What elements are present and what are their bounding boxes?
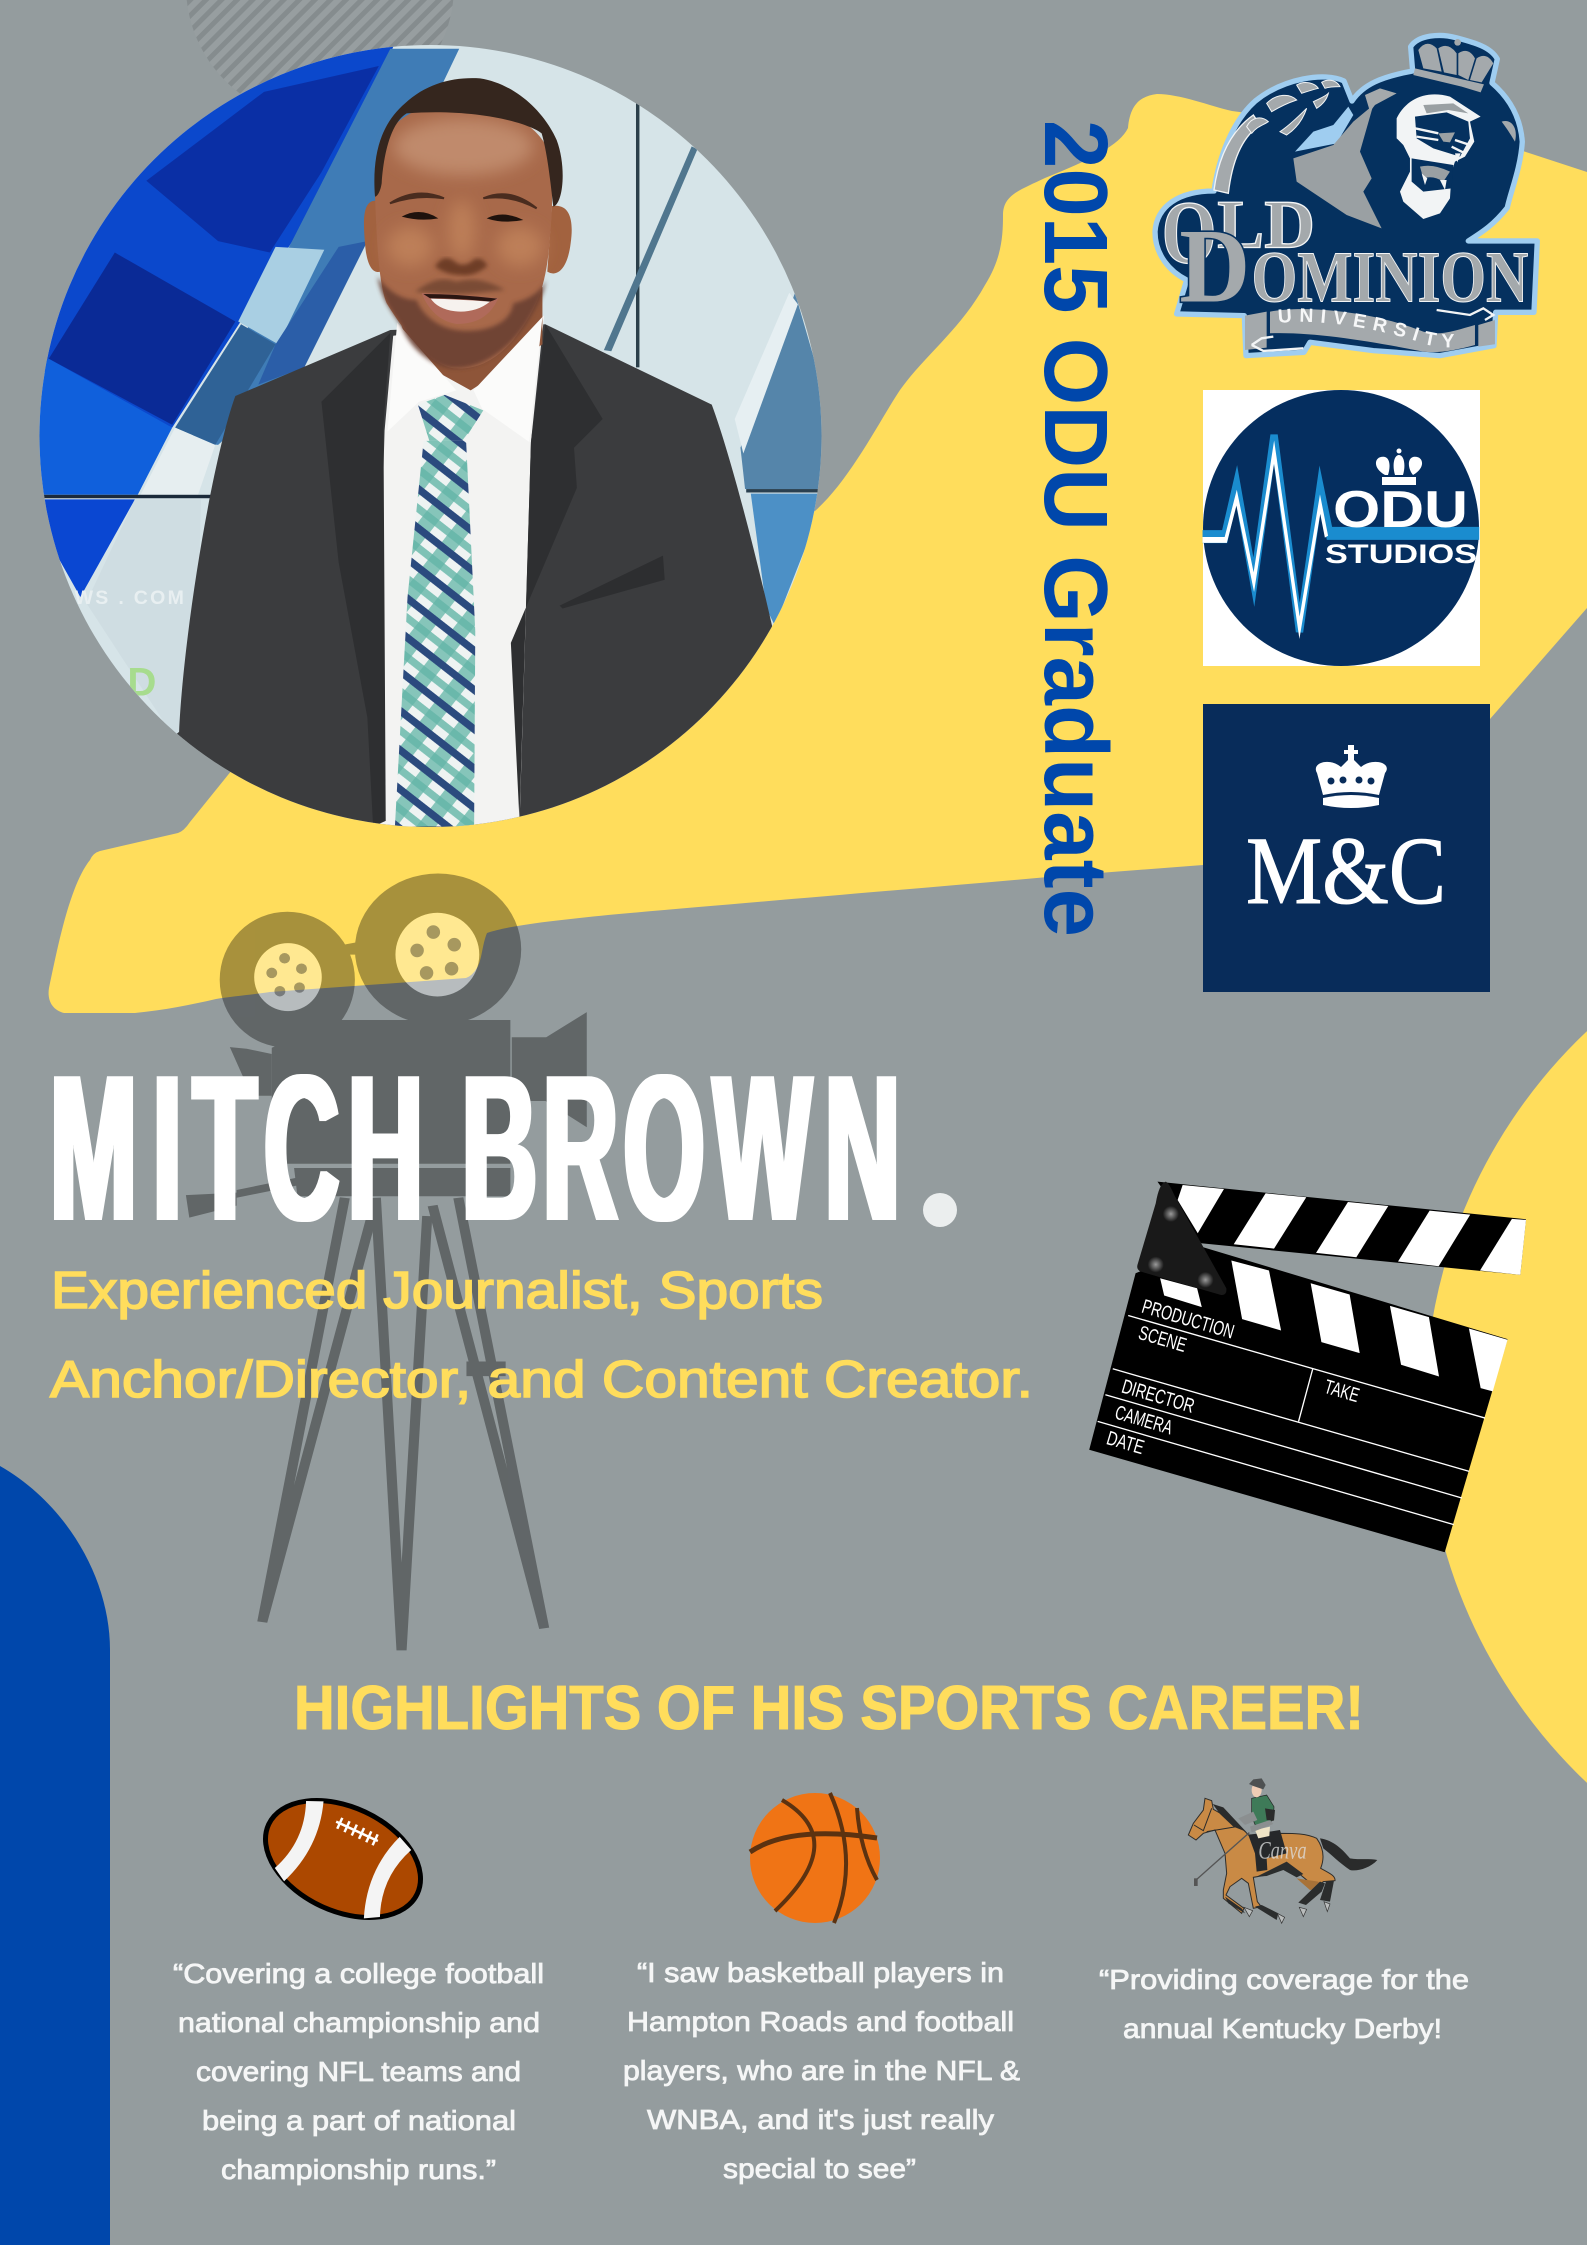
hair [374,78,563,207]
saddle [1248,1830,1287,1872]
lion face [1397,94,1481,219]
quote: basketball: players, who are in the NFL & [623,2055,1020,2086]
clapper arm [1157,1182,1526,1275]
wordmark D: D [1179,208,1250,325]
horse mane [1213,1804,1246,1832]
board labels: SCENE [1136,1322,1189,1357]
bridle [1194,1808,1237,1832]
film camera on tripod [186,874,587,1650]
banner ends [1245,312,1495,350]
yellow circle right edge [1425,890,1587,1924]
STUDIOS wordmark: STUDIOS [1325,539,1477,569]
tail [1320,1838,1377,1870]
faint screen text in photo: WS . COM [75,587,186,609]
rider head [1252,1783,1262,1797]
M&amp;C logo [1203,704,1490,992]
hooves [1244,1902,1330,1923]
board labels: DATE [1104,1427,1147,1459]
quote: Kentucky Derby: annual Kentucky Derby! [1123,2013,1442,2044]
portrait photo in circle [34,40,827,832]
title dot [923,1193,957,1227]
quote: football: being a part of national [202,2105,516,2136]
lion tongue [1420,166,1450,182]
Old Dominion University logo [1152,32,1540,358]
pulse line [1203,436,1479,631]
lion muzzle shadow [1415,112,1470,157]
blue corner shape [0,1466,110,2245]
lion nose [1438,132,1455,142]
left lapel [321,333,390,827]
subtitle: Experienced Journalist, Sports [51,1262,823,1320]
highlights heading: HIGHLIGHTS OF HIS SPORTS CAREER! [294,1674,1364,1743]
dark belly and legs [1225,1862,1334,1920]
board labels: PRODUCTION [1139,1296,1237,1344]
jacket pocket [560,556,665,608]
whiskers [1415,128,1470,153]
clapper body [1089,1247,1508,1552]
M&amp;C wordmark: M&C [1246,817,1446,924]
ODU wordmark: ODU [1333,481,1468,539]
brows [390,194,537,208]
banner ribbon highlights [1252,308,1493,351]
eyes [402,212,523,222]
board labels: TAKE [1322,1376,1362,1407]
crown [1413,44,1493,92]
right collar [477,317,542,386]
crown top [1454,39,1461,46]
jacket [177,324,772,827]
left collar [396,323,444,376]
body stripes [1160,1261,1508,1391]
quote: basketball: “I saw basketball players in [637,1957,1004,1988]
crown [1376,448,1422,485]
quote: Kentucky Derby: “Providing coverage for the [1099,1964,1469,1995]
quote: football: national championship and [178,2007,540,2038]
board labels: DIRECTOR [1119,1376,1197,1418]
vertical graduate label: 2015 ODU Graduate [1025,120,1125,937]
right lapel [511,324,603,821]
head [364,78,572,369]
camera silhouette [186,874,587,1650]
university banner [1270,309,1475,352]
quote: football: “Covering a college football [173,1958,544,1989]
neck [396,287,542,390]
arm stripes [1178,1185,1526,1275]
quote: football: championship runs.” [221,2154,496,2185]
icon: horse and rider [1188,1778,1377,1923]
wordmark OLD: O [1162,183,1217,282]
lion paw [1247,80,1340,135]
light blue gap under arm [1295,107,1353,152]
face highlights [387,118,543,267]
wordmark LD: LD [1217,187,1315,263]
lion arm [1214,115,1260,193]
ODU Studios logo [1203,390,1480,666]
rider thigh [1255,1827,1270,1838]
hinge rivets [1148,1206,1214,1288]
quote: Kentucky Derby [1099,1964,1469,2044]
moustache [415,279,505,294]
beard [377,277,546,368]
rider torso [1252,1795,1274,1828]
reel centre discs [254,913,479,1011]
quote: football [173,1958,544,2185]
quote: football: covering NFL teams and [196,2056,521,2087]
fangs [1422,148,1461,190]
lion brow [1423,103,1468,113]
rider helmet [1249,1778,1266,1789]
icon: basketball [750,1793,880,1923]
wordmark UNIVERSITY: UNIVERSITY [1278,308,1454,348]
face skin [375,105,552,369]
lion mouth [1412,158,1453,192]
logo silhouette [1155,35,1537,356]
mallet [1194,1833,1249,1886]
board lines [1098,1316,1485,1525]
quote: basketball: WNBA, and it's just really [647,2104,994,2135]
hinge [1137,1182,1226,1295]
yellow blob background [49,94,1587,1013]
far hind leg shade [1297,1878,1322,1890]
crown [1316,745,1387,808]
lion body fur [1293,105,1382,228]
ears [364,201,572,273]
rider arms [1238,1808,1275,1832]
tie [395,395,483,827]
nose [435,258,487,275]
horse body [1188,1798,1335,1913]
ear [1502,121,1516,142]
smile [422,293,498,324]
striped decorative circle [186,0,454,120]
watermark: Canva [1258,1836,1307,1864]
subtitle: Anchor/Director, and Content Creator. [50,1351,1033,1409]
icon: football [247,1777,439,1941]
quote: basketball [623,1957,1020,2184]
shirt [373,316,544,827]
board labels [1104,1296,1362,1459]
subtitle [50,1262,1033,1409]
clapperboard [1089,1182,1526,1552]
mane highlight [1365,88,1397,112]
quote: basketball: special to see” [723,2153,916,2184]
quote: basketball: Hampton Roads and football [627,2006,1014,2037]
board labels: CAMERA [1112,1402,1175,1439]
name title: MITCH BROWN [50,1032,900,1266]
photo green letter: D [127,660,156,705]
